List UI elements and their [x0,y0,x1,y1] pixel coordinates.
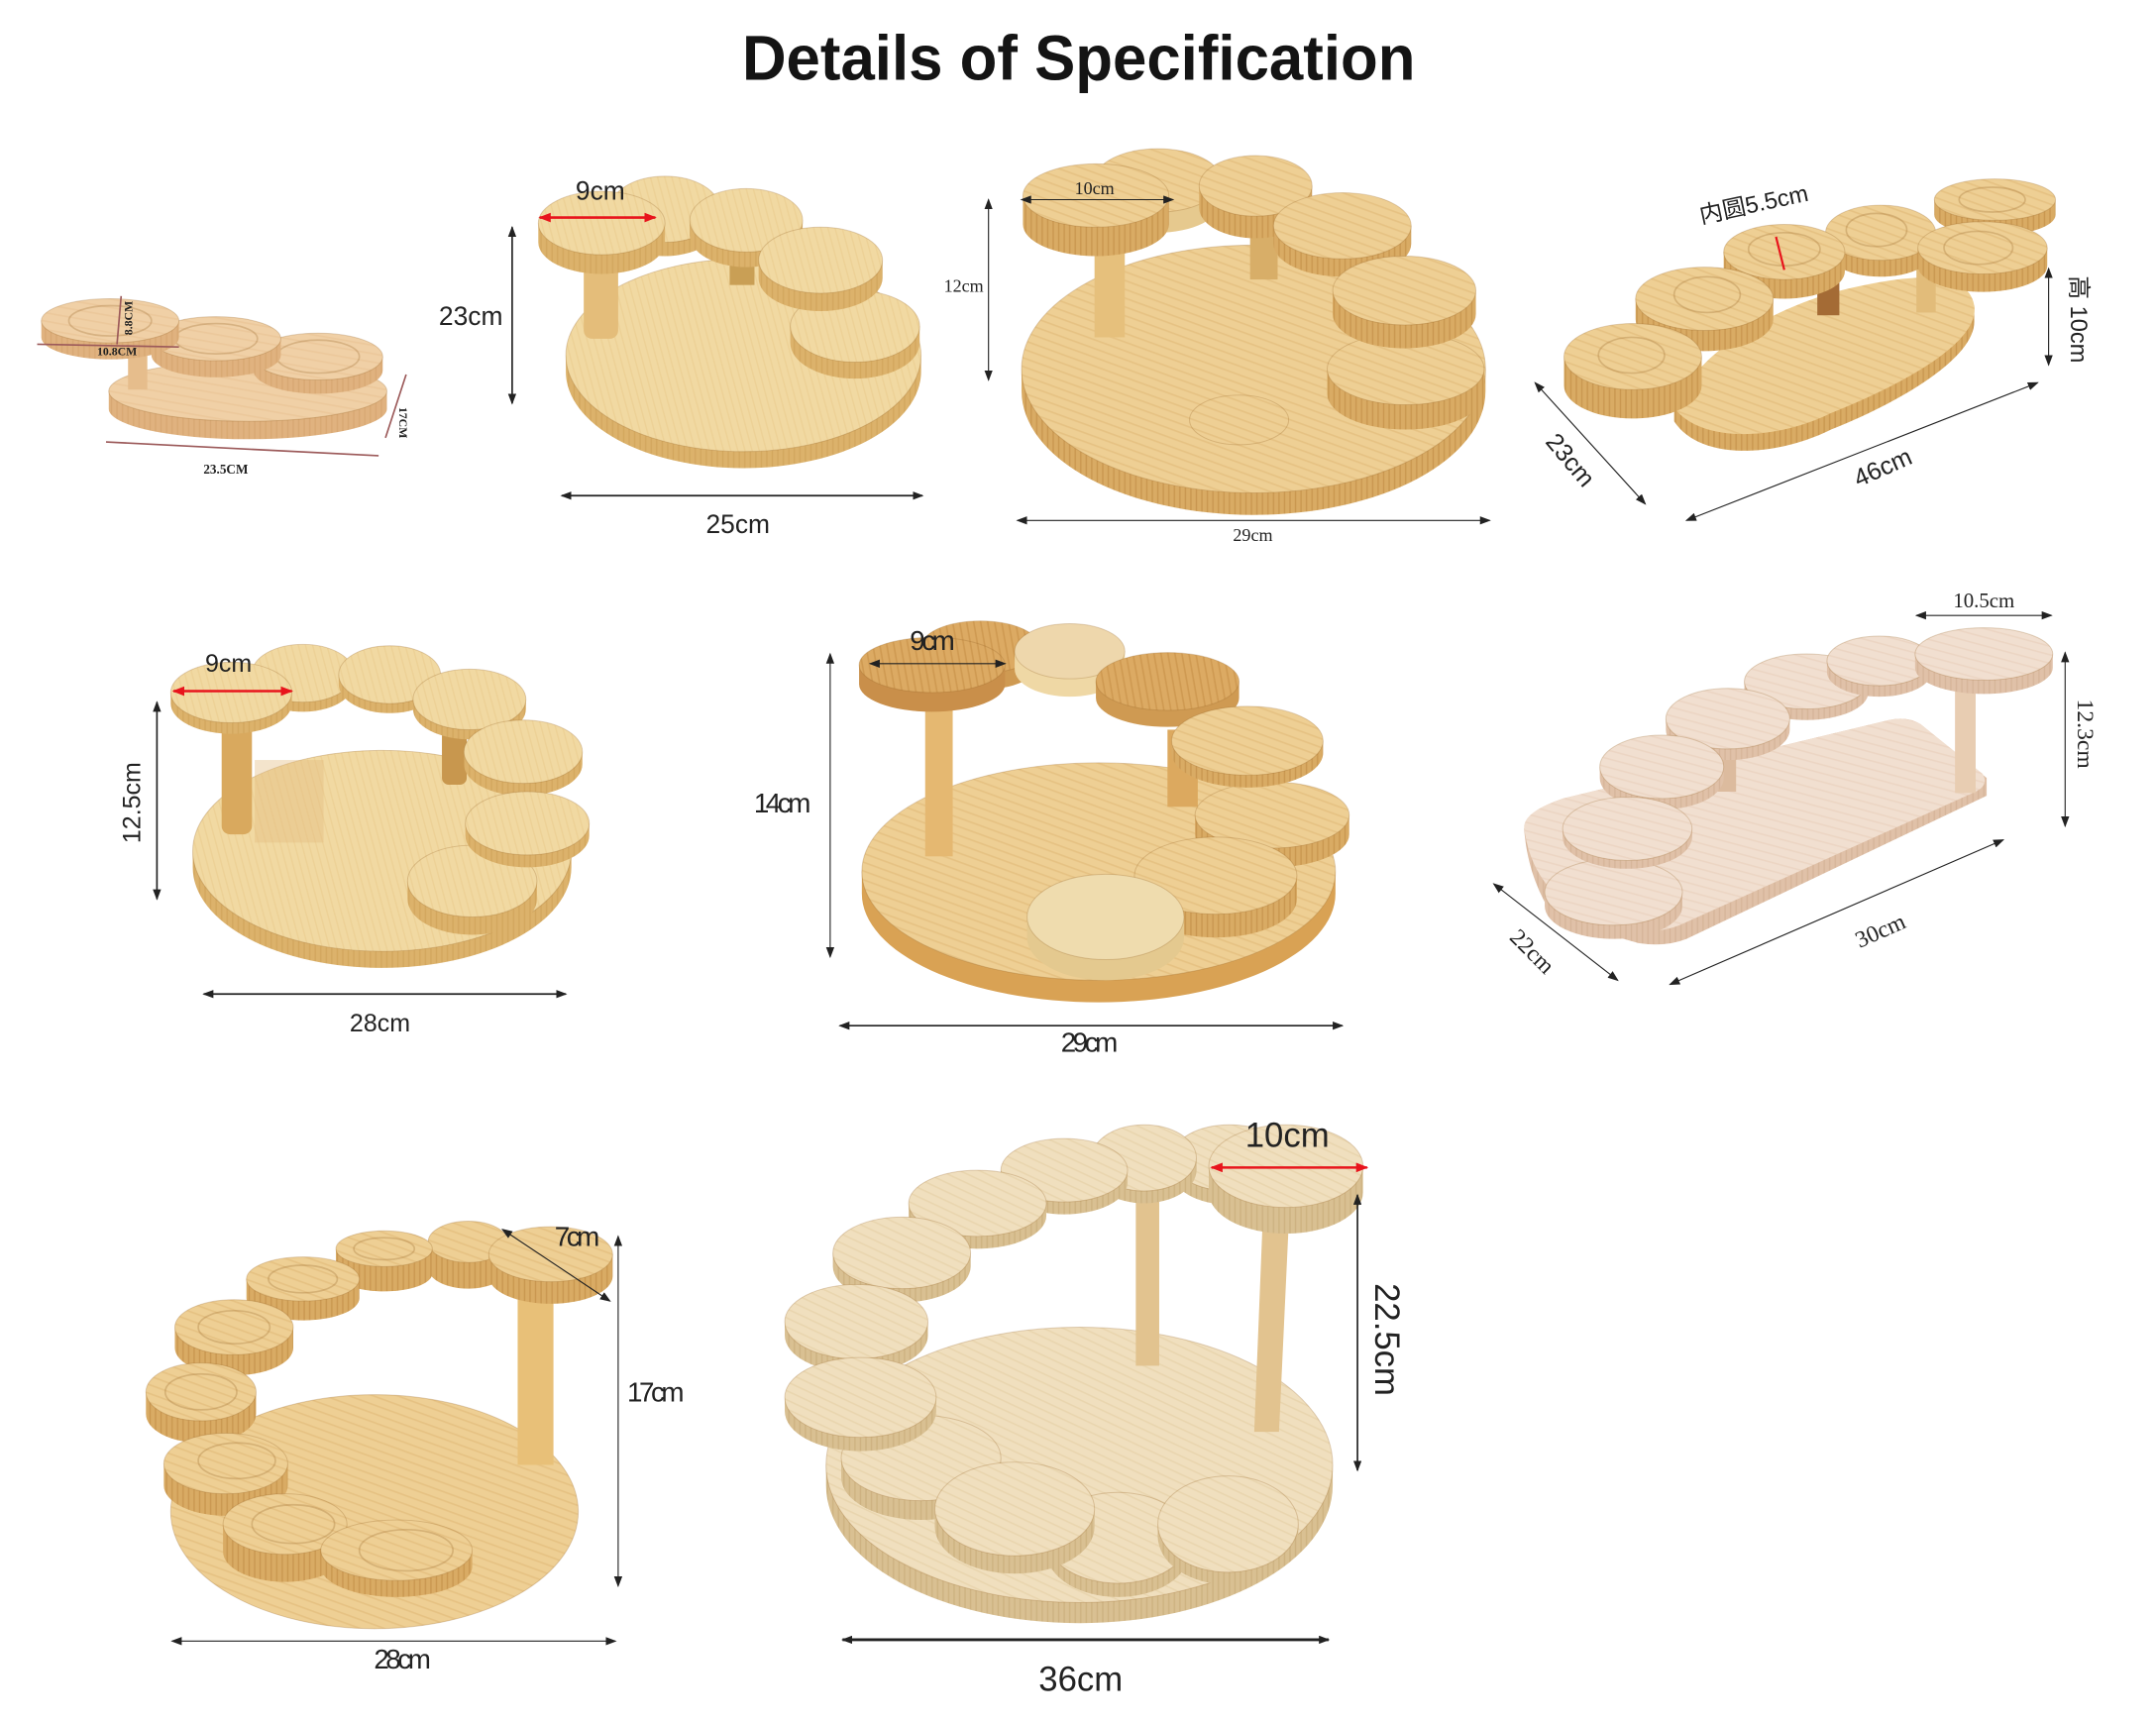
panel: product 8, 28cm stand with recessed discs [146,1222,683,1674]
panel: product 6, 29cm stand darker wood [754,621,1349,1058]
label 17CM: 17CM [396,407,410,438]
label height 10cm: 高 10cm [2065,275,2092,363]
label 14cm: 14cm [754,788,809,818]
label 36cm: 36cm [1038,1661,1123,1698]
label 23.5CM: 23.5CM [203,462,249,477]
base board [193,750,572,968]
label 10cm: 10cm [1075,178,1115,198]
support posts [1717,686,1976,793]
tier discs [859,621,1349,980]
tier discs [538,176,919,378]
support post [517,1294,554,1464]
label 29cm: 29cm [1061,1027,1117,1058]
label 9cm: 9cm [576,175,625,205]
base board [1524,718,1987,944]
base board [862,763,1336,1003]
dimension arrows [842,1167,1367,1640]
label 12.5cm: 12.5cm [119,762,147,843]
label 22.5cm: 22.5cm [1367,1283,1405,1396]
label 17cm: 17cm [627,1377,683,1408]
tier discs [42,299,382,393]
panel: product 4, 46cm stand with recessed discs [1535,179,2092,520]
dimension arrows [512,218,922,495]
label 28cm: 28cm [374,1644,430,1674]
support posts [584,255,754,339]
panel: product 7, 30cm pale stand [1494,589,2098,985]
title: Details of Specification [742,23,1415,94]
support posts [222,723,467,834]
label 46cm: 46cm [1850,443,1916,492]
base board [1022,245,1485,515]
label 29cm: 29cm [1233,525,1273,545]
label 7cm: 7cm [555,1222,598,1252]
dimension arrows [172,1230,618,1641]
label 30cm: 30cm [1852,909,1909,953]
panel: product 2, 25cm stand [439,175,922,539]
tier discs [1545,628,2053,939]
label 8.8CM: 8.8CM [121,301,135,335]
base board [170,1395,579,1629]
tier discs [1023,149,1484,430]
base board [826,1328,1333,1623]
label 9cm: 9cm [205,650,252,678]
panel: product 3, 29cm stand [944,149,1489,545]
support posts [1135,1198,1289,1432]
label 23cm: 23cm [1540,428,1600,492]
dimension lines [38,296,406,456]
dimension arrows [989,199,1489,520]
dimension arrows [1494,615,2065,985]
label 12cm: 12cm [944,276,984,296]
panel: product 5, 28cm stand [119,644,590,1037]
tier discs [785,1125,1363,1597]
label 10.5cm: 10.5cm [1953,589,2014,612]
base board [566,259,921,468]
dimension arrows [157,692,566,994]
label 22cm: 22cm [1504,924,1560,980]
base board [109,361,386,439]
panel: product 9, 36cm large stand [785,1117,1405,1698]
label 28cm: 28cm [350,1010,410,1037]
tier discs [170,644,590,935]
label 12.3cm: 12.3cm [2072,700,2098,769]
dimension arrows [830,654,1343,1025]
support post [128,344,148,389]
panel: product 1, three-tier stand 23.5cm [38,296,410,477]
label 25cm: 25cm [706,509,770,539]
label 9cm: 9cm [910,625,954,656]
base board [1674,277,1975,451]
recessed discs [1564,179,2056,418]
label inner circle 5.5cm: 内圆5.5cm [1697,180,1810,229]
label 23cm: 23cm [439,301,502,331]
support posts [1817,269,1936,315]
support posts [1095,227,1277,337]
support posts [925,702,1198,856]
label 10cm: 10cm [1245,1117,1330,1154]
recessed discs [146,1222,612,1597]
label 10.8CM: 10.8CM [97,345,137,359]
dimension arrows [1535,237,2049,520]
